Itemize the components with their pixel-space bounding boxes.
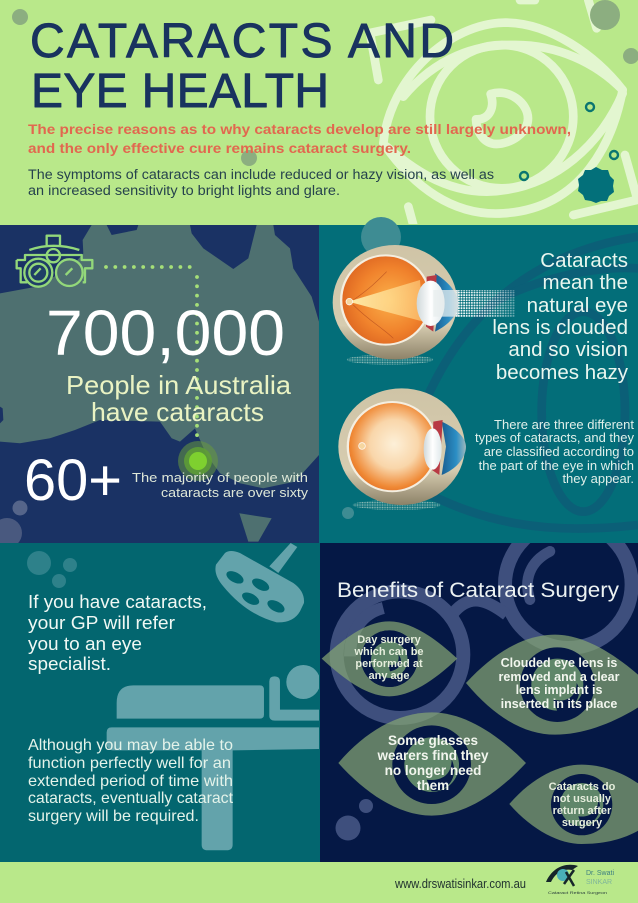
intro text [28, 167, 494, 198]
decorative circles [336, 799, 373, 840]
map of Australia [0, 225, 319, 542]
cataract definition text: and so vision [508, 338, 628, 361]
icon: binocular eye instrument [17, 236, 92, 287]
benefit text: lens implant [499, 656, 620, 711]
eye 2 [466, 635, 638, 735]
cataract definition text: mean the [543, 271, 628, 294]
teal scalloped badge [578, 167, 614, 203]
title [30, 15, 454, 118]
benefit text: lens implant: lens implant is [516, 683, 602, 697]
panel: benefits of surgery [320, 521, 638, 862]
benefit text: day surgery: Day surgery [357, 634, 422, 646]
cataract definition text: lens is clouded [492, 316, 628, 339]
benefit text: no return [549, 781, 616, 829]
referral text: you to an eye [28, 633, 142, 654]
eye 1 [322, 621, 457, 696]
panel: what cataracts are [319, 217, 638, 543]
eye diagram: healthy view [338, 388, 466, 510]
stat caption [132, 470, 309, 500]
subtitle: and the only effective cure remains cataract surgery. [28, 140, 411, 156]
stat caption: cataracts are over sixty [161, 485, 309, 500]
surgery text: surgery will be required. [28, 808, 199, 825]
eye diagram: clouded lens [333, 245, 458, 365]
dotted connector line [106, 267, 199, 436]
panel: referral and surgery [0, 543, 320, 862]
surgery text [28, 737, 234, 825]
logo: Dr. Swati [586, 870, 614, 877]
cataract types text: There are three different [494, 417, 634, 432]
light beam [456, 290, 515, 317]
cataract types text: types of cataracts, and they [475, 430, 634, 445]
title: CATARACTS AND [30, 15, 454, 68]
footer [0, 862, 638, 903]
title: EYE HEALTH [31, 65, 329, 118]
background eye outline [427, 237, 638, 529]
decorative circles [342, 217, 401, 519]
benefit text: no return: not usually [553, 793, 612, 805]
subtitle [28, 121, 571, 156]
heading: Benefits of Cataract Surgery [337, 579, 620, 602]
benefit text: day surgery [353, 634, 424, 682]
small teal rings [520, 103, 618, 180]
subtitle: The precise reasons as to why cataracts develop are still largely unknown, [28, 121, 571, 137]
benefit text: day surgery: any age [369, 670, 409, 682]
benefit text: lens implant: inserted in its place [501, 697, 617, 711]
referral text: If you have cataracts, [28, 591, 207, 612]
cataract definition text [492, 249, 629, 384]
benefit text: day surgery: performed at [355, 658, 423, 670]
stat: 60+: 60+ [24, 448, 122, 513]
decorative circles [27, 551, 77, 588]
logo: SINKAR [586, 879, 612, 886]
referral text: specialist. [28, 653, 111, 674]
illustration: surgical lamp and patient [107, 543, 320, 850]
cataract definition text: Cataracts [540, 249, 628, 272]
benefit text: glasses: no longer need [385, 763, 481, 778]
decorative circles [12, 0, 638, 166]
stat label: have cataracts [91, 397, 264, 427]
surgery text: Although you may be able to [28, 737, 233, 754]
ground shadow [347, 355, 433, 365]
referral text: your GP will refer [28, 612, 175, 633]
surgery text: extended period of time with [28, 773, 233, 790]
icon: large outlined eye [370, 0, 637, 225]
cataract types text: are classified according to [484, 444, 634, 459]
benefit text: glasses: them [417, 778, 449, 793]
panel: 700,000 statistics [0, 225, 320, 548]
stat caption: The majority of people with [132, 470, 308, 485]
ground shadow [353, 500, 441, 510]
benefit text: no return: return after [553, 805, 612, 817]
intro text: an increased sensitivity to bright lights and glare. [28, 183, 340, 198]
intro text: The symptoms of cataracts can include reduced or hazy vision, as well as [28, 167, 494, 182]
benefit eyes [322, 621, 638, 844]
benefit text: lens implant: removed and a clear [499, 670, 620, 684]
referral text [28, 591, 207, 674]
benefit text: no return: Cataracts do [549, 781, 616, 793]
eye 4 [509, 765, 638, 844]
eye 3 [338, 712, 526, 816]
benefit text: lens implant: Clouded eye lens is [501, 656, 617, 670]
benefit text: glasses: Some glasses [388, 733, 478, 748]
benefit text: no return: surgery [562, 817, 603, 829]
benefit text: day surgery: which can be [353, 646, 424, 658]
benefit text: glasses: wearers find they [376, 748, 489, 763]
logo: Cataract Retina Surgeon [548, 890, 607, 895]
cataract types text: they appear. [562, 471, 634, 486]
location marker [178, 441, 218, 481]
cataract definition text: becomes hazy [496, 361, 629, 384]
surgery text: function perfectly well for an [28, 755, 231, 772]
website address: www.drswatisinkar.com.au [394, 876, 526, 891]
stat label [66, 370, 292, 427]
cataract definition text: natural eye [527, 294, 628, 317]
stat: 700,000: 700,000 [46, 297, 285, 369]
panel: header decoration [12, 0, 638, 225]
cataract types text [475, 417, 634, 486]
background glasses outline [337, 521, 632, 718]
benefit text: glasses [376, 733, 489, 793]
surgery text: cataracts, eventually cataract [28, 790, 234, 807]
cataract types text: the part of the eye in which [479, 458, 634, 473]
small circles [0, 500, 28, 548]
stat label: People in Australia [66, 370, 292, 400]
logo [546, 865, 614, 895]
